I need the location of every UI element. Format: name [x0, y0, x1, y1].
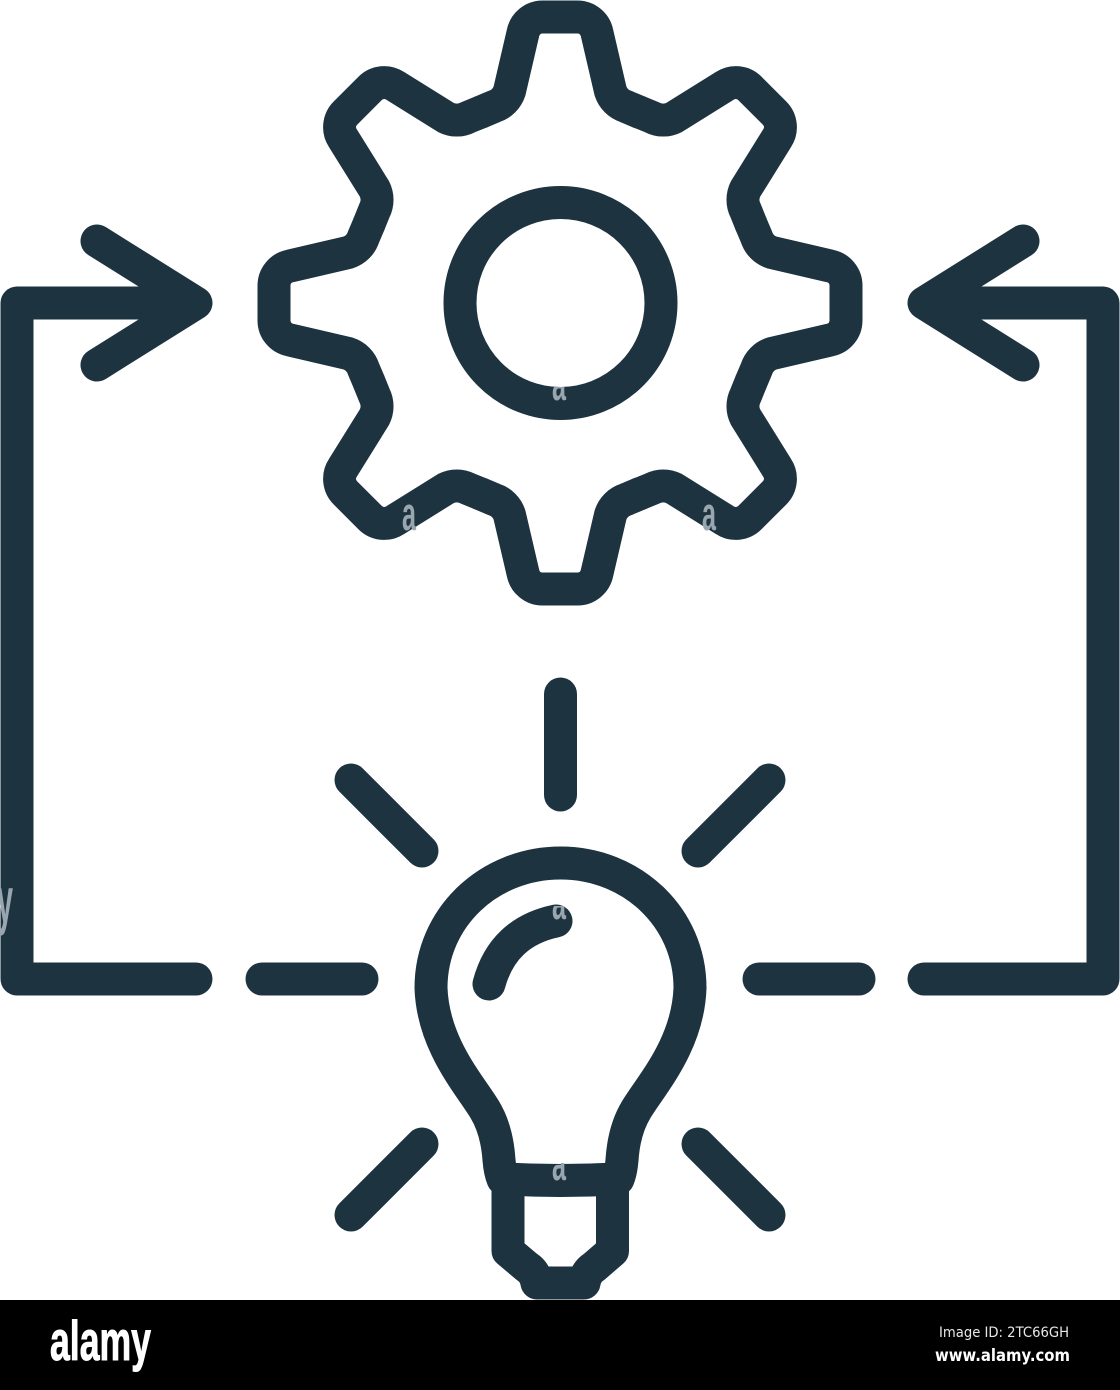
footer website: www.alamy.com — [935, 1346, 1070, 1366]
bulb glass — [431, 863, 690, 1179]
gear outline teeth — [274, 17, 846, 589]
bulb highlight — [489, 921, 556, 984]
bulb socket — [508, 1180, 612, 1283]
dash: left connector — [262, 962, 362, 996]
footer image id: Image ID: 2TC66GH — [939, 1325, 1069, 1341]
watermark letters: a — [552, 876, 566, 929]
watermark letters: a — [552, 357, 566, 410]
bulb collar — [505, 1179, 616, 1180]
gear hub ring — [460, 202, 661, 404]
watermark letters — [402, 357, 716, 1190]
watermark letters: a — [402, 487, 416, 540]
watermark letters: a — [702, 487, 716, 540]
watermark letters: a — [552, 1137, 566, 1190]
icon: light bulb — [431, 863, 690, 1283]
icon: light rays — [351, 694, 769, 1215]
arrow: left feedback into gear — [17, 241, 196, 979]
footer bar — [0, 1300, 1120, 1390]
arrow: right feedback into gear — [924, 241, 1103, 979]
footer logo: alamy — [50, 1309, 151, 1372]
dash: right connector — [759, 962, 859, 996]
icon: gear — [274, 17, 846, 589]
